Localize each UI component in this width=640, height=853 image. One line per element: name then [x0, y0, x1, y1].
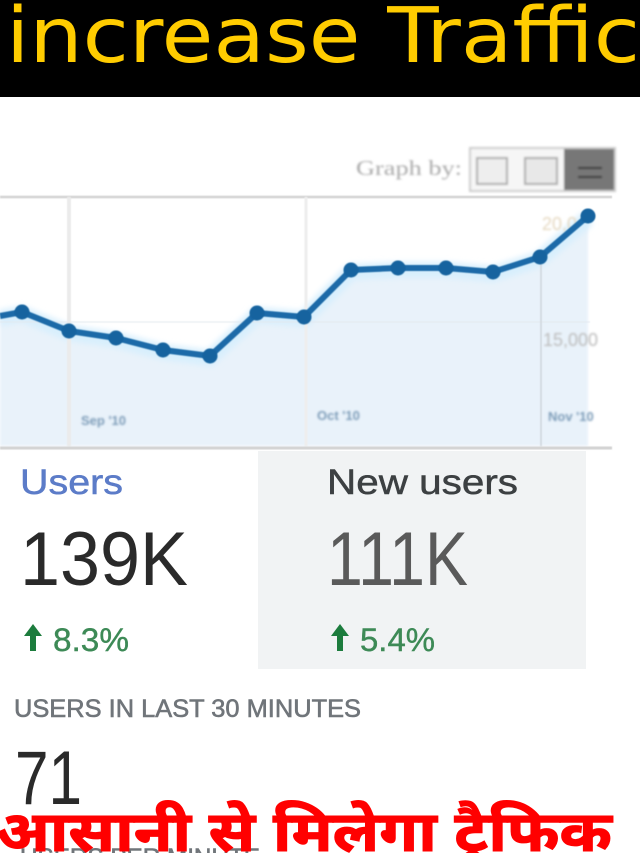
metric: users: Users [20, 463, 123, 502]
axis labels: Nov '10 [548, 409, 594, 424]
axis labels: Oct '10 [317, 408, 360, 423]
chart area fill [0, 216, 588, 446]
panel: new users background [258, 451, 586, 669]
metric: new users: New users [327, 463, 518, 502]
metric: users in last 30 minutes: 71 [15, 736, 82, 821]
chart frame and gridlines [0, 197, 612, 448]
metric: users: 8.3% [53, 622, 129, 658]
line chart [0, 197, 612, 448]
axis labels: Sep '10 [81, 413, 126, 428]
metric: users in last 30 minutes: USERS IN LAST 30 MINUTES [14, 695, 361, 723]
data points [14, 208, 596, 364]
metric: new users: 111K [327, 517, 468, 602]
graph-by control: Graph by: [356, 156, 462, 180]
metric: new users: 5.4% [360, 622, 435, 658]
axis labels: 20,0 [542, 214, 577, 234]
axis labels: 15,000 [543, 330, 598, 350]
data line [0, 216, 588, 356]
graph-by control [356, 148, 615, 191]
axis labels [81, 214, 598, 428]
metric: users in last 30 minutes [14, 695, 361, 853]
metric: users [20, 463, 188, 658]
metric: users: 139K [20, 517, 188, 602]
metric: new users [327, 463, 518, 658]
line glow [0, 218, 588, 358]
